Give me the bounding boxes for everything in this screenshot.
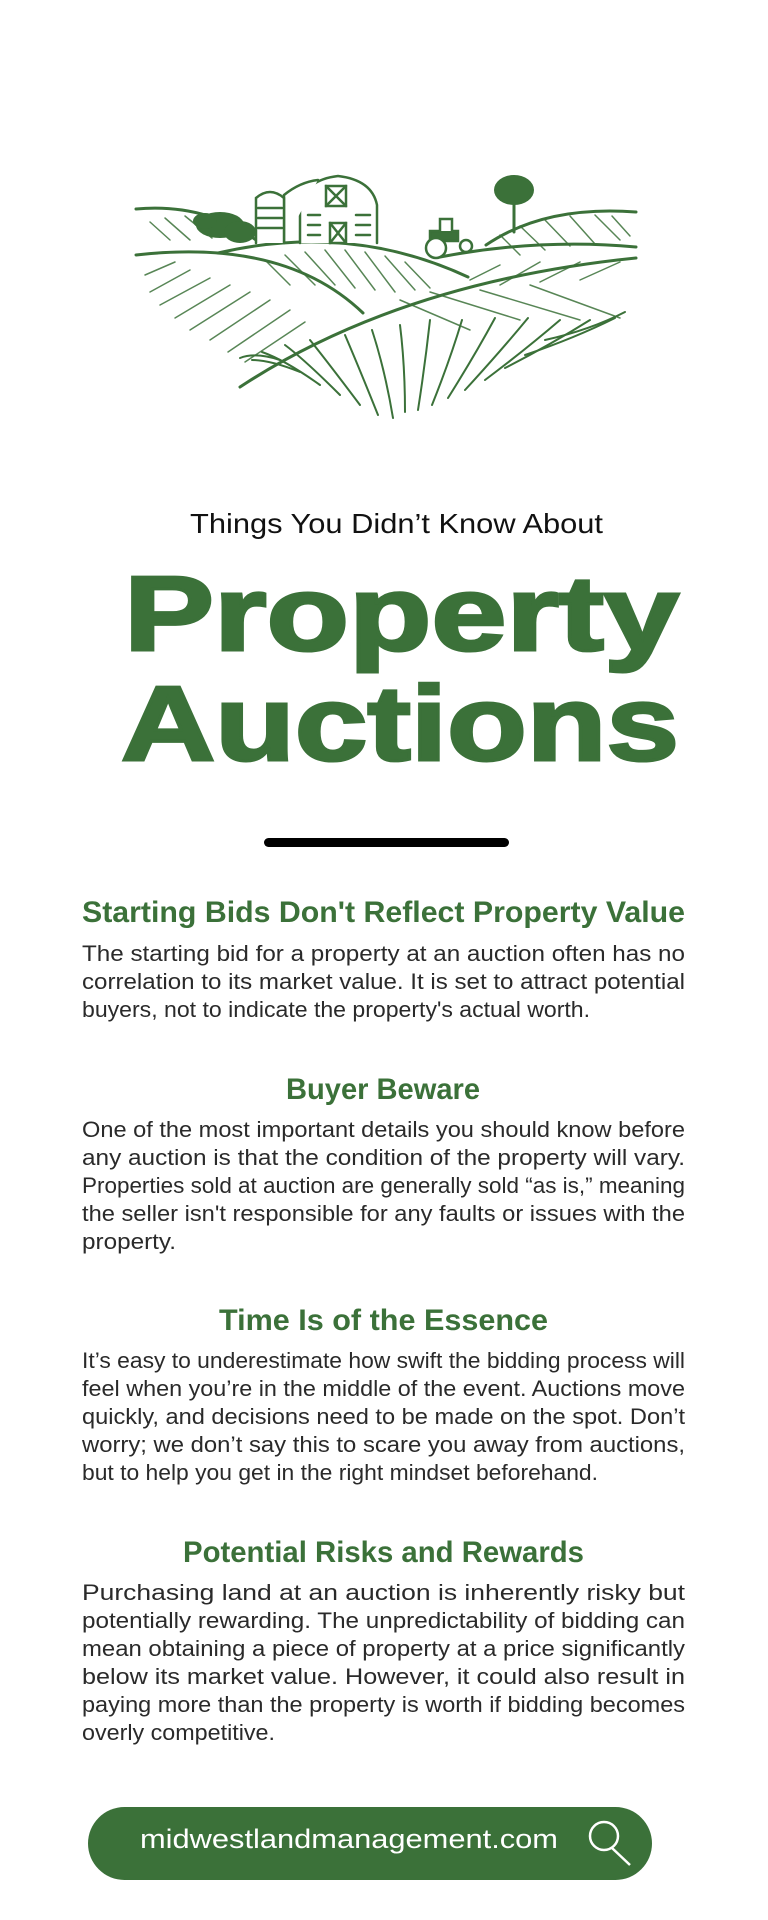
icon: barn (284, 176, 377, 243)
body 3: It’s easy to underestimate how swift the bidding process will (82, 1348, 685, 1373)
heading 4: Potential Risks and Rewards (183, 1536, 584, 1569)
body 4: overly competitive. (82, 1720, 275, 1745)
body 2: One of the most important details you should know before (82, 1117, 685, 1142)
body 3: quickly, and decisions need to be made on the spot. Don’t (82, 1404, 685, 1429)
body 3: worry; we don’t say this to scare you away from auctions, (81, 1432, 685, 1457)
hatching (145, 215, 630, 362)
body 3: feel when you’re in the middle of the event. Auctions move (82, 1376, 685, 1401)
icon: bushes (193, 212, 256, 243)
heading 1: Starting Bids Don't Reflect Property Value (82, 896, 685, 929)
body 2: property. (82, 1229, 176, 1254)
body 4: below its market value. However, it could also result in (82, 1664, 685, 1689)
body 4: paying more than the property is worth if bidding becomes (82, 1692, 685, 1717)
subtitle: Things You Didn’t Know About (190, 508, 603, 539)
body 1 (82, 941, 685, 1022)
body 4: potentially rewarding. The unpredictability of bidding can (82, 1608, 685, 1633)
body 4: Purchasing land at an auction is inherently risky but (82, 1580, 685, 1605)
body 4 (82, 1580, 685, 1745)
body 2: the seller isn't responsible for any faults or issues with the (82, 1201, 685, 1226)
body 3: but to help you get in the right mindset beforehand. (82, 1460, 598, 1485)
title: Property Auctions: Property (124, 555, 679, 673)
front field fan lines (240, 312, 625, 418)
hills outlines (136, 208, 636, 387)
divider bar (264, 838, 509, 847)
body 2: Properties sold at auction are generally sold “as is,” meaning (82, 1173, 685, 1198)
body 2: any auction is that the condition of the property will vary. (82, 1145, 685, 1170)
section 3 (81, 1304, 685, 1485)
icon: tractor (426, 219, 472, 258)
body 1: buyers, not to indicate the property's actual worth. (82, 997, 590, 1022)
title: Property Auctions (121, 555, 679, 783)
body 4: mean obtaining a piece of property at a price significantly (82, 1636, 685, 1661)
footer pill: website (88, 1807, 652, 1880)
icon: silo (256, 192, 284, 243)
body 3 (81, 1348, 685, 1485)
icon: search (590, 1822, 630, 1865)
body 2 (82, 1117, 685, 1254)
heading 3: Time Is of the Essence (219, 1304, 548, 1337)
icon: tree (494, 175, 534, 232)
body 1: The starting bid for a property at an auction often has no (82, 941, 685, 966)
website url: midwestlandmanagement.com (140, 1824, 558, 1854)
section 1 (82, 896, 685, 1022)
section 4 (82, 1536, 685, 1745)
heading 2: Buyer Beware (286, 1073, 480, 1106)
section 2 (82, 1073, 685, 1254)
illustration: farm landscape (136, 175, 636, 418)
title: Property Auctions: Auctions (121, 665, 679, 783)
body 1: correlation to its market value. It is set to attract potential (82, 969, 685, 994)
